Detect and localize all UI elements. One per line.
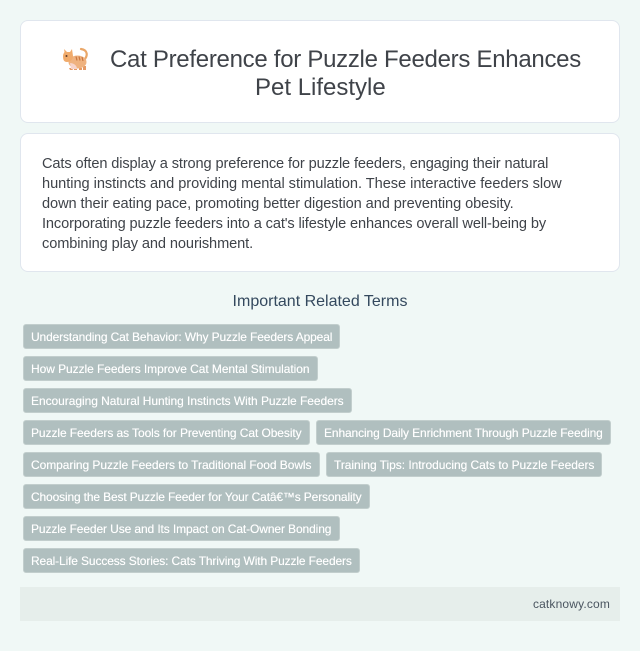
title line 1: Cat Preference for Puzzle Feeders Enhances [110, 46, 581, 73]
description text: down their eating pace, promoting better digestion and preventing obesity. [42, 196, 514, 212]
heading: related terms: Important Related Terms [233, 293, 407, 310]
tag: Comparing Puzzle Feeders to Traditional Food Bowls [31, 458, 311, 472]
description text: combining play and nourishment. [42, 236, 253, 252]
title line 2: Pet Lifestyle [255, 74, 386, 101]
tag [23, 548, 360, 573]
panel: description [20, 133, 620, 272]
description text: hunting instincts and providing mental stimulation. These interactive feeders slow [42, 176, 562, 192]
tag group: related terms [23, 324, 611, 573]
tag: Puzzle Feeder Use and Its Impact on Cat-Owner Bonding [31, 522, 331, 536]
tag [23, 324, 340, 349]
tag: Puzzle Feeders as Tools for Preventing Cat Obesity [31, 426, 302, 440]
tag [23, 388, 352, 413]
description text: Cats often display a strong preference for puzzle feeders, engaging their natural [42, 156, 548, 172]
tag: Encouraging Natural Hunting Instincts With Puzzle Feeders [31, 394, 344, 408]
tag [23, 420, 310, 445]
tag: Understanding Cat Behavior: Why Puzzle Feeders Appeal [31, 330, 332, 344]
footer bar [20, 587, 620, 621]
tag [23, 484, 370, 509]
tag: Choosing the Best Puzzle Feeder for Your Catâ€™s Personality [31, 490, 362, 504]
tag [326, 452, 602, 477]
footer source: catknowy.com [533, 597, 610, 611]
description text: Incorporating puzzle feeders into a cat's lifestyle enhances overall well-being by [42, 216, 546, 232]
panel: title card [20, 20, 620, 123]
tag [316, 420, 611, 445]
tag: Enhancing Daily Enrichment Through Puzzle Feeding [324, 426, 603, 440]
description text [42, 156, 562, 252]
tag: Real-Life Success Stories: Cats Thriving With Puzzle Feeders [31, 554, 352, 568]
tag [23, 452, 320, 477]
tag [23, 516, 340, 541]
icon: cat [63, 48, 88, 70]
tag: Training Tips: Introducing Cats to Puzzle Feeders [334, 458, 594, 472]
tag [23, 356, 318, 381]
tag: How Puzzle Feeders Improve Cat Mental Stimulation [31, 362, 310, 376]
